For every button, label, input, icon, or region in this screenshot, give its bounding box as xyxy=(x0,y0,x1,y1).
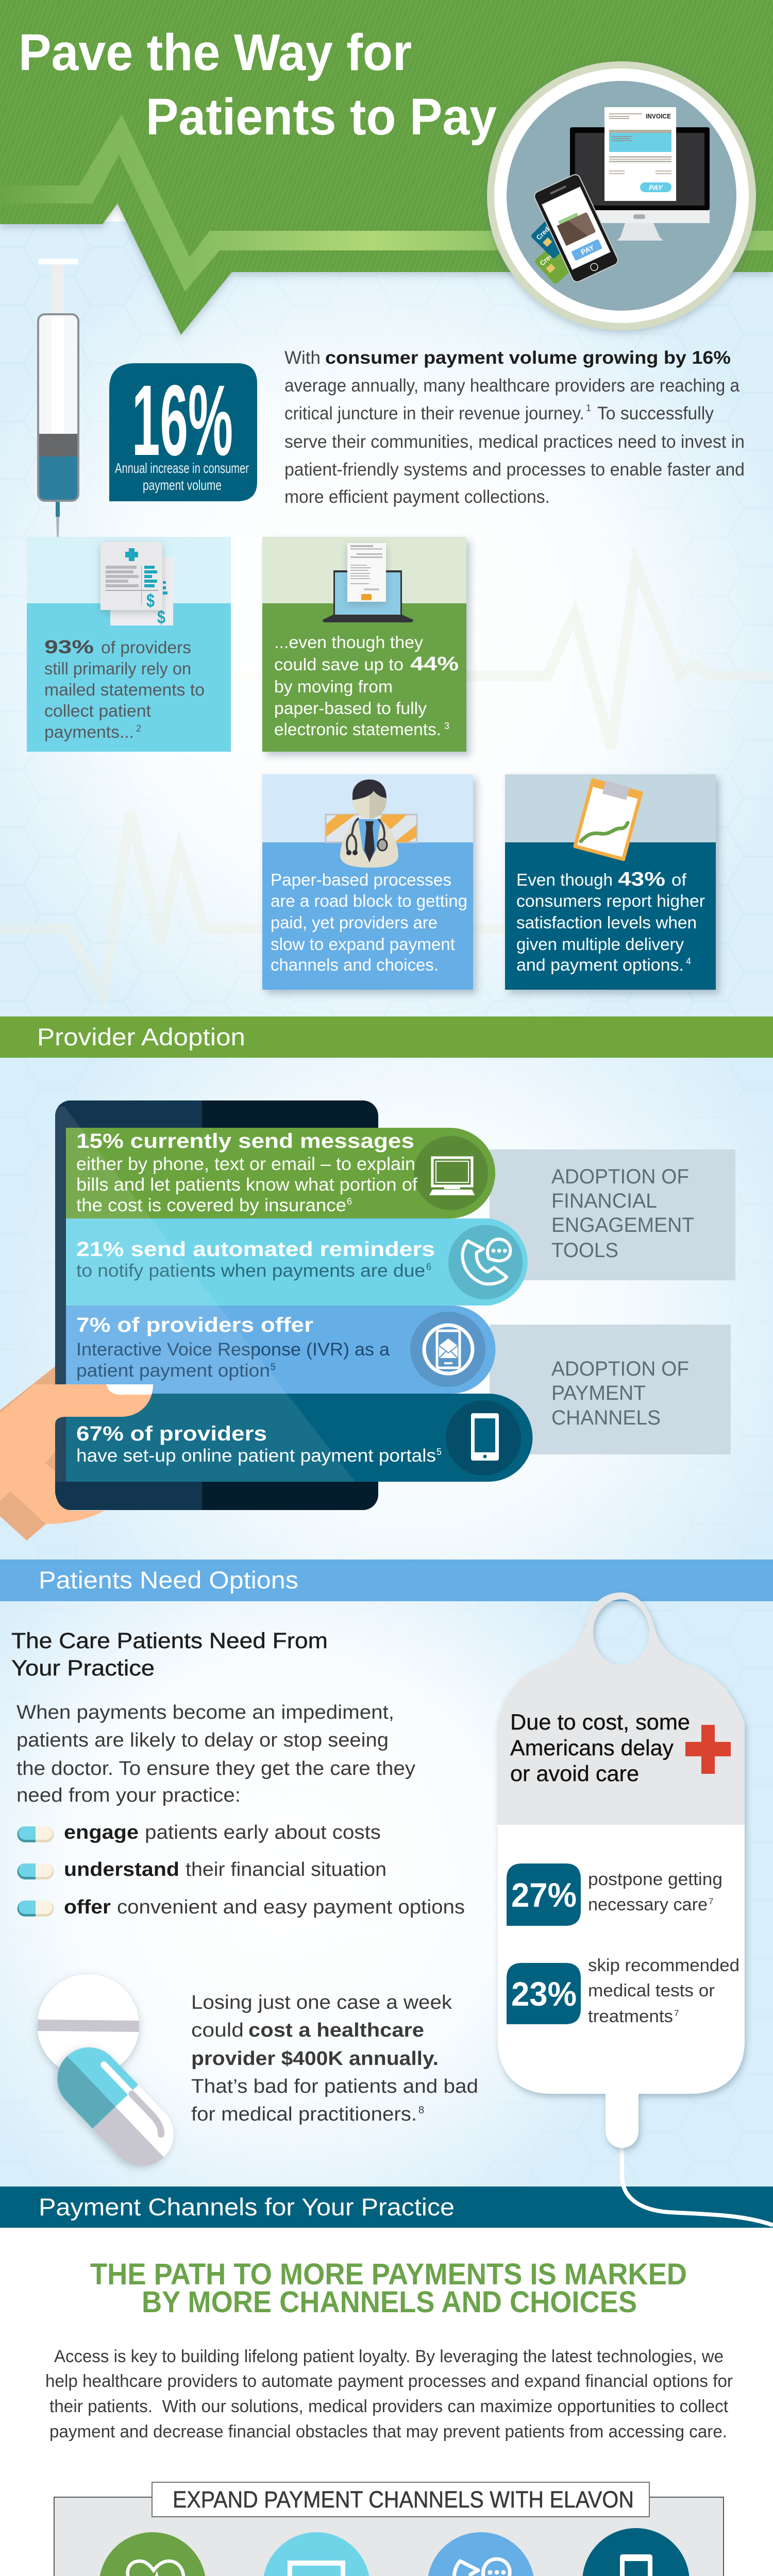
intro paragraph: critical juncture in their revenue journey. xyxy=(284,403,584,423)
stat text: either by phone, text or email – to explain xyxy=(76,1154,415,1174)
stat: 27% postpone: 27% xyxy=(511,1876,577,1914)
section heading: Patients Need Options xyxy=(0,1560,773,1601)
stat text: Even though xyxy=(516,870,613,889)
panel: adoption of financial engagement tools xyxy=(490,1149,735,1280)
stat text xyxy=(76,1422,442,1466)
panel title xyxy=(152,2482,649,2517)
bag body xyxy=(498,1592,745,2148)
stat text: the cost is covered by insurance xyxy=(76,1195,346,1215)
panel: adoption of financial engagement tools: ADOPTION OF xyxy=(551,1165,689,1188)
stat text: bills and let patients know what portion of xyxy=(76,1175,417,1195)
stat text: given multiple delivery xyxy=(516,935,684,954)
panel: save up to 44% xyxy=(262,537,466,752)
stat text: 15% currently send messages xyxy=(76,1130,414,1153)
bar: 21% automated reminders: to notify patients when payments are due xyxy=(76,1261,425,1281)
stat text: of providers xyxy=(101,638,191,657)
text block: losing one case a week: That’s bad for patients and bad xyxy=(191,2076,478,2097)
icon: bullet pill 3 xyxy=(17,1901,54,1917)
stat text: could save up to xyxy=(274,655,404,674)
bar: 67% online portals xyxy=(66,1394,533,1482)
invoice: PAY xyxy=(649,183,663,192)
icon: paper statements xyxy=(100,542,173,628)
intro paragraph xyxy=(284,348,745,507)
callout: 16% annual increase: Annual increase in consumer xyxy=(115,460,249,476)
heading: the care patients need: Your Practice xyxy=(11,1656,155,1681)
bag heading xyxy=(510,1710,690,1786)
panel: paper-based road block xyxy=(262,774,473,990)
heading: path to more payments xyxy=(90,2258,687,2319)
bar: 7% interactive voice response xyxy=(66,1306,496,1394)
stat text: have set-up online patient payment portals xyxy=(76,1446,436,1466)
stat: 23% skip: skip recommended xyxy=(588,1956,740,1975)
stat text: consumers report higher xyxy=(516,891,705,910)
stat text: 44% xyxy=(410,653,459,675)
bar: 15% send messages xyxy=(66,1128,495,1218)
text block: access is key: help healthcare providers to automate payment processes and expand financial options for xyxy=(45,2371,733,2391)
icon: doctor with road block xyxy=(326,779,417,868)
stat text: 3 xyxy=(444,721,449,731)
list text: their financial situation xyxy=(186,1859,386,1880)
text block: when payments become an impediment: the doctor. To ensure they get the care they xyxy=(16,1758,415,1780)
bag heading: Americans delay xyxy=(510,1736,674,1760)
IV tube wire xyxy=(622,2146,773,2225)
icon: computer xyxy=(414,1136,488,1210)
stat text: collect patient xyxy=(44,701,151,720)
stat text xyxy=(271,870,467,974)
section heading: Provider Adoption xyxy=(0,1016,773,1058)
icon: bullet pill 2 xyxy=(17,1863,54,1879)
icon: phone with envelope xyxy=(410,1312,485,1387)
list text: offer xyxy=(64,1896,111,1918)
text block: losing one case a week xyxy=(191,1992,478,2125)
background: intro section xyxy=(0,222,773,1018)
title xyxy=(19,24,497,146)
panel: expand payment channels with Elavon xyxy=(54,2482,724,2576)
intro paragraph: serve their communities, medical practices need to invest in xyxy=(284,432,745,452)
bar: 21% automated reminders xyxy=(66,1218,528,1306)
title: Pave the Way for xyxy=(19,24,412,81)
stat text: and payment options. xyxy=(516,955,684,974)
credit cards xyxy=(530,203,590,285)
invoice xyxy=(604,107,676,201)
stat: 27% postpone xyxy=(507,1863,722,1926)
illustration: invoice and phone in circle xyxy=(487,61,756,330)
syringe illustration xyxy=(38,259,78,569)
stat: 23% skip xyxy=(507,1956,740,2026)
bar: 7% interactive voice response: Interactive Voice Response (IVR) as a xyxy=(76,1340,390,1360)
panel: 43% higher satisfaction xyxy=(505,774,716,990)
text block: access is key: their patients. With our solutions, medical providers can maximize opportunities to collect xyxy=(49,2397,729,2416)
icon: paper statements: $ xyxy=(157,606,165,628)
stat text xyxy=(274,633,459,739)
stat text xyxy=(76,1130,417,1215)
smartphone: PAY xyxy=(580,243,596,256)
bag heading: Due to cost, some xyxy=(510,1710,690,1735)
text block: when payments become an impediment xyxy=(16,1702,415,1806)
stat text: payments... xyxy=(44,722,134,741)
panel: adoption of payment channels: PAYMENT xyxy=(551,1382,646,1404)
stat: 23% skip: medical tests or xyxy=(588,1981,715,2001)
stat text: electronic statements. xyxy=(274,720,441,739)
background: provider adoption section xyxy=(0,1058,773,1560)
text block: losing one case a week: provider $400K annually. xyxy=(191,2048,439,2070)
list text: understand xyxy=(64,1859,179,1880)
stat text: 2 xyxy=(136,723,141,734)
panel: adoption of financial engagement tools: ENGAGEMENT xyxy=(551,1214,694,1236)
stat text: paid, yet providers are xyxy=(271,913,438,932)
stat text: 93% xyxy=(44,636,94,657)
stat: 23% skip: 23% xyxy=(511,1975,577,2013)
stat text: mailed statements to xyxy=(44,680,205,699)
icon: red cross xyxy=(685,1725,731,1774)
stat text: 6 xyxy=(347,1196,352,1207)
stat text: channels and choices. xyxy=(271,955,439,974)
icon: laptop with statement xyxy=(323,543,413,622)
panel: adoption of financial engagement tools: FINANCIAL xyxy=(551,1190,657,1212)
channel: online xyxy=(263,2532,370,2576)
bag heading: or avoid care xyxy=(510,1761,639,1786)
icon: tablet and capsule xyxy=(37,1974,187,2179)
tablet device xyxy=(55,1100,378,1510)
section heading: Payment Channels: Payment Channels for Your Practice xyxy=(39,2193,455,2221)
callout: 16% annual increase: 16% xyxy=(132,364,233,477)
stat text: 43% xyxy=(618,869,665,890)
text block: when payments become an impediment: need from your practice: xyxy=(16,1785,241,1806)
section heading: Provider Adoption: Provider Adoption xyxy=(37,1023,245,1050)
panel: 93% mailed statements xyxy=(27,537,262,752)
text block: losing one case a week: could xyxy=(191,2020,244,2041)
stat text: Paper-based processes xyxy=(271,870,451,889)
panel: adoption of payment channels: CHANNELS xyxy=(551,1406,661,1429)
panel: adoption of financial engagement tools: TOOLS xyxy=(551,1239,618,1262)
IV bag xyxy=(498,1592,773,2225)
stat text: slow to expand payment xyxy=(271,935,455,954)
list: engage understand offer xyxy=(17,1822,465,1918)
monitor xyxy=(570,127,710,241)
icon: bullet pill 1 xyxy=(17,1826,54,1842)
stat: 27% postpone: postpone getting xyxy=(588,1870,722,1889)
text block: access is key xyxy=(45,2347,733,2442)
bar: 7% interactive voice response: 5 xyxy=(271,1362,276,1372)
tablet glare xyxy=(55,1106,355,1482)
channel: point of care xyxy=(99,2532,206,2576)
stat text: still primarily rely on xyxy=(44,659,191,678)
stat text: 67% of providers xyxy=(76,1422,267,1445)
icon: clipboard xyxy=(573,777,644,861)
intro paragraph: consumer payment volume growing by 16% xyxy=(325,348,731,368)
intro paragraph: To successfully xyxy=(597,403,714,423)
list text: convenient and easy payment options xyxy=(117,1896,465,1918)
heading: path to more payments: BY MORE CHANNELS AND CHOICES xyxy=(142,2285,637,2319)
icon: mobile phone xyxy=(446,1400,521,1476)
callout: 16% annual increase: payment volume xyxy=(143,477,222,493)
background: patients need options section xyxy=(0,1601,773,2187)
stat text: paper-based to fully xyxy=(274,699,427,718)
title: Patients to Pay xyxy=(146,88,497,146)
stat text: of xyxy=(671,870,687,889)
stat text: 21% send automated reminders xyxy=(76,1238,435,1261)
text block: losing one case a week: cost a healthcare xyxy=(248,2020,424,2041)
text block: losing one case a week: for medical practitioners. xyxy=(191,2104,417,2125)
panel: adoption of payment channels xyxy=(490,1325,731,1454)
stat text: are a road block to getting xyxy=(271,891,467,910)
stat text: by moving from xyxy=(274,677,393,696)
text block: access is key: payment and decrease financial obstacles that may prevent patients from accessing care. xyxy=(49,2422,727,2442)
intro paragraph: more efficient payment collections. xyxy=(284,487,550,507)
icon: hand holding tablet xyxy=(0,1366,153,1540)
panel: adoption of payment channels: ADOPTION OF xyxy=(551,1358,689,1380)
list text: engage xyxy=(64,1822,139,1843)
icon: paper statements: $ xyxy=(146,590,155,611)
heading: path to more payments: THE PATH TO MORE PAYMENTS IS MARKED xyxy=(90,2258,687,2291)
heading: the care patients need xyxy=(11,1629,328,1681)
icon: phone and speech bubble xyxy=(448,1225,523,1299)
stat text xyxy=(44,636,205,741)
section heading: Payment Channels xyxy=(0,2187,773,2228)
channel: phone / IVR xyxy=(427,2532,534,2576)
stat: 27% postpone: 7 xyxy=(709,1896,713,1906)
stat: 23% skip: treatments xyxy=(588,2007,673,2026)
stat text: 7% of providers offer xyxy=(76,1314,313,1336)
heading: the care patients need: The Care Patients Need From xyxy=(11,1629,328,1653)
stat text: ...even though they xyxy=(274,633,424,652)
panel title: EXPAND PAYMENT CHANNELS WITH ELAVON xyxy=(173,2486,634,2513)
bar: 21% automated reminders: 6 xyxy=(426,1262,431,1272)
credit cards: Credit xyxy=(538,248,558,267)
bar: 7% interactive voice response: patient payment option xyxy=(76,1361,270,1381)
bag top xyxy=(498,1592,745,1825)
header: green heartbeat banner xyxy=(0,0,773,335)
text block: access is key: Access is key to building lifelong patient loyalty. By leveraging the latest technologies, we xyxy=(54,2347,724,2366)
text block: losing one case a week: Losing just one case a week xyxy=(191,1992,452,2013)
text block: when payments become an impediment: patients are likely to delay or stop seeing xyxy=(16,1730,389,1751)
stat text xyxy=(516,869,705,974)
invoice: INVOICE xyxy=(646,112,671,120)
stat text: satisfaction levels when xyxy=(516,913,697,932)
intro paragraph: 1 xyxy=(586,403,591,413)
stat text: 4 xyxy=(686,956,691,967)
intro paragraph: With xyxy=(284,348,321,368)
stat: 23% skip: 7 xyxy=(674,2008,679,2018)
section heading: Patients Need Options: Patients Need Options xyxy=(39,1566,298,1594)
intro paragraph: average annually, many healthcare providers are reaching a xyxy=(284,376,740,396)
list text: patients early about costs xyxy=(145,1822,381,1843)
list text xyxy=(64,1822,465,1918)
text block: losing one case a week: 8 xyxy=(418,2105,424,2116)
stat text: 5 xyxy=(436,1447,442,1457)
text block: when payments become an impediment: When payments become an impediment, xyxy=(16,1702,394,1723)
channel: mobile / tablet xyxy=(582,2528,690,2576)
smartphone xyxy=(533,173,619,283)
credit cards: Credit xyxy=(534,222,554,242)
intro paragraph: patient-friendly systems and processes to enable faster and xyxy=(284,460,745,480)
stat: 27% postpone: necessary care xyxy=(588,1895,708,1914)
callout: 16% annual increase xyxy=(109,363,257,501)
